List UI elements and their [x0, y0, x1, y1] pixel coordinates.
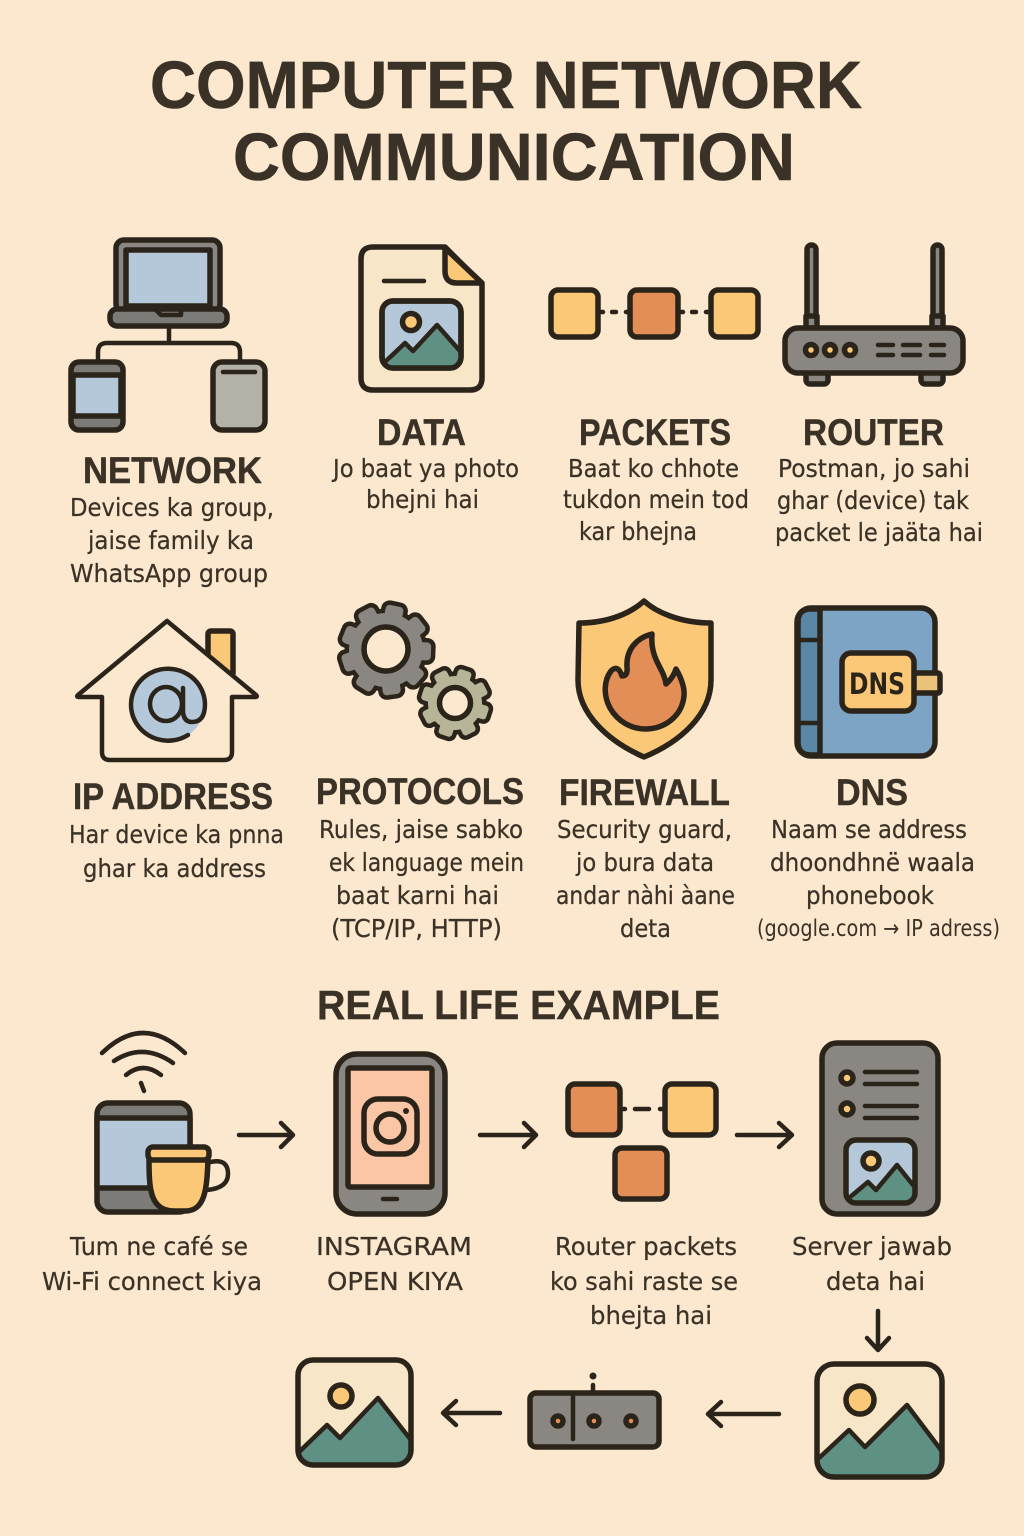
description: network: jaise family ka	[87, 526, 254, 555]
caption: router packets: Router packets	[555, 1232, 737, 1261]
icon: small router	[530, 1372, 659, 1447]
description: firewall: Security guard,	[557, 815, 732, 844]
icon: scattered packets	[568, 1084, 716, 1199]
heading: network: NETWORK	[83, 450, 262, 491]
description: packets	[563, 454, 749, 546]
panel: router	[775, 245, 983, 547]
icon: server with image	[822, 1043, 938, 1214]
icon: dns phonebook: DNS	[849, 667, 905, 701]
description: network	[70, 493, 274, 588]
icon: document with picture	[361, 247, 482, 390]
description: protocols: baat karni hai	[336, 881, 499, 910]
caption: wi-fi connect: Tum ne café se	[69, 1232, 248, 1261]
arrow: server down to image	[867, 1311, 889, 1350]
icon: phone with instagram logo	[336, 1054, 445, 1214]
description: protocols: ek language mein	[329, 848, 524, 877]
heading: packets: PACKETS	[579, 412, 731, 453]
caption: instagram open: OPEN KIYA	[327, 1267, 463, 1296]
caption: server reply: Server jawab	[792, 1232, 952, 1261]
description: network: WhatsApp group	[70, 559, 268, 588]
description: dns: Naam se address	[771, 815, 967, 844]
icon: router	[785, 245, 963, 384]
heading: protocols: PROTOCOLS	[316, 771, 524, 812]
step: server reply	[792, 1043, 952, 1296]
panel: packets	[551, 290, 758, 546]
description: data	[331, 454, 519, 514]
icon: three linked packets	[551, 290, 758, 337]
description: router: Postman, jo sahi	[778, 454, 970, 483]
caption: server reply: deta hai	[826, 1267, 925, 1296]
caption: wi-fi connect: Wi-Fi connect kiya	[42, 1267, 262, 1296]
arrow: instagram to packets	[480, 1123, 536, 1147]
description: dns: phonebook	[806, 881, 934, 910]
caption: router packets: bhejta hai	[590, 1301, 712, 1330]
icon: image from server	[817, 1364, 942, 1477]
step: instagram open	[316, 1054, 472, 1296]
icon: two gears	[332, 596, 498, 746]
description: dns	[757, 815, 1000, 942]
description: ip address: ghar ka address	[83, 854, 266, 883]
caption: wi-fi connect	[42, 1232, 262, 1296]
caption: router packets	[550, 1232, 738, 1330]
icon: shield with flame	[578, 601, 711, 757]
title	[150, 48, 862, 195]
icon: dns phonebook	[797, 608, 940, 756]
description: firewall: deta	[620, 914, 671, 943]
arrow: router to final image	[443, 1401, 500, 1425]
description: data: bhejni hai	[366, 485, 479, 514]
icon: tablet with wifi and coffee cup	[97, 1033, 228, 1212]
panel: firewall	[556, 601, 735, 943]
arrow: packets to server	[737, 1123, 792, 1147]
description: router: ghar (device) tak	[777, 486, 969, 515]
step: router packets	[550, 1084, 738, 1330]
description: dns: dhoondhnë waala	[770, 848, 975, 877]
description: data: Jo baat ya photo	[331, 454, 519, 483]
heading: real life example: REAL LIFE EXAMPLE	[317, 982, 720, 1028]
heading: router: ROUTER	[803, 412, 944, 453]
description: network: Devices ka group,	[70, 493, 274, 522]
description: packets: kar bhejna	[579, 517, 697, 546]
icon: final image on device	[297, 1359, 412, 1466]
description: router	[775, 454, 983, 547]
description: firewall: andar nàhi àane	[556, 881, 735, 910]
title: COMMUNICATION	[233, 120, 795, 195]
description: ip address	[69, 820, 284, 883]
description: ip address: Har device ka pnna	[69, 820, 284, 849]
title: COMPUTER NETWORK	[150, 48, 862, 123]
description: protocols: Rules, jaise sabko	[319, 815, 523, 844]
panel: ip address	[69, 621, 284, 883]
icon: house with at sign	[77, 621, 257, 760]
panel: protocols	[316, 596, 524, 943]
description: protocols	[319, 815, 524, 943]
description: firewall	[556, 815, 735, 943]
description: packets: tukdon mein tod	[563, 485, 749, 514]
arrow: image to router	[708, 1402, 779, 1426]
description: router: packet le jaäta hai	[775, 518, 983, 547]
arrow: wi-fi to instagram	[239, 1123, 293, 1147]
panel: network	[70, 240, 274, 588]
caption: router packets: ko sahi raste se	[550, 1267, 738, 1296]
heading: firewall: FIREWALL	[559, 772, 730, 813]
caption: instagram open: INSTAGRAM	[316, 1232, 472, 1261]
heading: data: DATA	[377, 412, 466, 453]
panel: data	[331, 247, 519, 514]
heading: dns: DNS	[836, 772, 908, 813]
icon: laptop connected to two devices	[71, 240, 265, 430]
caption: instagram open	[316, 1232, 472, 1296]
description: firewall: jo bura data	[575, 848, 714, 877]
description: protocols: (TCP/IP, HTTP)	[331, 914, 502, 943]
caption: server reply	[792, 1232, 952, 1296]
description: packets: Baat ko chhote	[568, 454, 739, 483]
step: wi-fi connect	[42, 1033, 262, 1296]
panel: dns	[757, 608, 1000, 942]
heading: ip address: IP ADDRESS	[73, 776, 273, 817]
